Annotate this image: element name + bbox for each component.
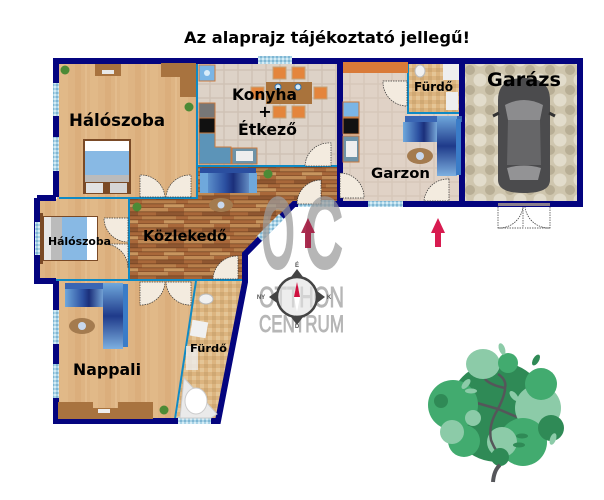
- furniture: living room: [58, 283, 168, 419]
- room: hallway floor: [129, 167, 339, 281]
- outer walls: [37, 61, 580, 421]
- compass: [257, 261, 332, 330]
- compass: NY: [257, 295, 265, 301]
- room: kitchen floor: [197, 62, 339, 168]
- furniture: small bedroom: [40, 213, 98, 264]
- watermark logo: [259, 180, 344, 338]
- compass: D: [295, 324, 300, 330]
- furniture: bedroom: [60, 63, 196, 194]
- room: garage floor: [464, 62, 579, 203]
- logo letters: C: [305, 180, 342, 287]
- room: small bedroom floor: [39, 199, 129, 280]
- label: studio bathroom: Fürdő: [414, 80, 453, 94]
- logo wordmark: [259, 282, 344, 338]
- label: small bedroom: Hálószoba: [48, 235, 111, 248]
- compass: É: [295, 261, 299, 269]
- room: bedroom floor: [57, 62, 198, 199]
- fixtures: bathroom: [180, 294, 217, 418]
- logo letters: O: [262, 180, 294, 287]
- garage door: [498, 203, 550, 206]
- label: hallway: Közlekedő: [143, 227, 227, 245]
- title: Az alaprajz tájékoztató jellegű!: [184, 28, 470, 47]
- car: [493, 78, 555, 193]
- label: kitchen and dining: +: [258, 102, 272, 121]
- room: studio bathroom floor: [408, 62, 459, 114]
- label: bathroom: Fürdő: [190, 342, 227, 355]
- compass: K: [327, 295, 332, 301]
- interior walls: [40, 63, 459, 419]
- room: bathroom floor: [176, 281, 245, 420]
- label: living room: Nappali: [73, 360, 141, 379]
- room: living room floor: [57, 280, 197, 420]
- room: studio floor: [342, 62, 460, 203]
- label: garage: Garázs: [487, 69, 561, 91]
- floor plan: [35, 56, 580, 424]
- furniture: kitchen: [199, 65, 327, 164]
- furniture: studio: [343, 62, 462, 176]
- doors: [104, 81, 550, 305]
- label: bedroom: Hálószoba: [69, 111, 165, 131]
- logo wordmark: OTTHON: [259, 282, 344, 314]
- arrow: entrance 2: [431, 218, 445, 247]
- tree: [428, 342, 564, 482]
- furniture: hall sofa: [132, 168, 272, 212]
- logo wordmark: CENTRUM: [259, 311, 344, 338]
- label: kitchen and dining: Konyha: [232, 85, 297, 104]
- arrow: entrance 1: [301, 218, 315, 248]
- label: kitchen and dining: Étkező: [238, 120, 297, 139]
- label: studio: Garzon: [371, 166, 430, 182]
- label: kitchen and dining: [232, 85, 297, 139]
- windows: [35, 56, 403, 424]
